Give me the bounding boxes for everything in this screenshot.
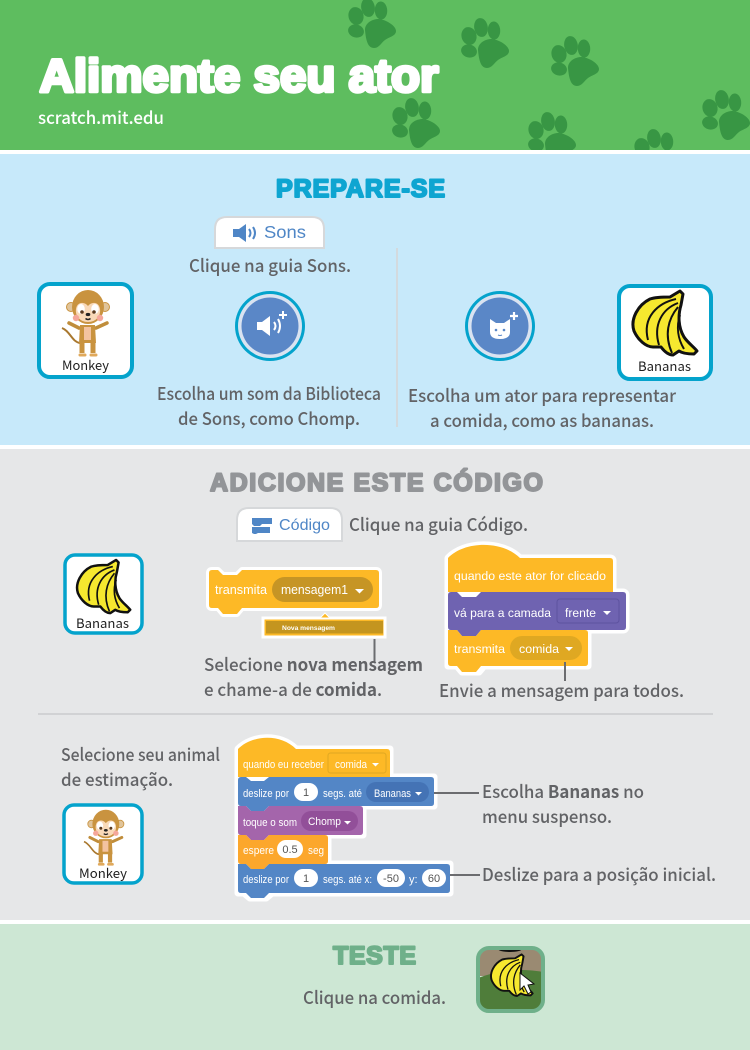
code stack: when sprite clicked: comida (519, 642, 559, 656)
code stack: when I receive (238, 738, 450, 898)
connector to bananas note (434, 792, 479, 794)
text: broadcast: Envie a mensagem para todos. (439, 678, 684, 703)
icon: bananas on stage with cursor (478, 946, 543, 1012)
code stack: when I receive: segs. até x: (323, 874, 372, 886)
code stack: when I receive: seg (308, 845, 324, 857)
code stack: when I receive: comida (335, 759, 368, 771)
code stack: when I receive: 1 (303, 787, 309, 799)
connector to position note (450, 874, 480, 876)
block: transmita with menu: mensagem1 (281, 582, 348, 597)
sprite card: monkey (39, 284, 132, 377)
code stack: when I receive: toque o som (243, 817, 297, 829)
block: transmita with menu (209, 570, 385, 637)
heading: adicione este codigo: ADICIONE ESTE CÓDIGO (210, 467, 543, 497)
panel: adicione este codigo (0, 449, 750, 920)
code stack: when I receive: Chomp (308, 816, 341, 828)
text: select pet: Selecione seu animal (61, 742, 220, 767)
code stack: when I receive: 0.5 (282, 844, 298, 856)
text: select new message: e chame-a de comida. (204, 677, 382, 702)
code stack: when sprite clicked: vá para a camada (454, 606, 551, 620)
panel: prepare-se (0, 154, 750, 445)
code stack: when I receive: quando eu receber (243, 759, 324, 771)
code stack: when I receive: y: (409, 874, 418, 886)
text: choose a sound (157, 381, 381, 431)
code stack: when I receive: -50 (383, 873, 399, 885)
text: clique na guia sons: Clique na guia Sons. (189, 253, 351, 278)
code stack: when I receive: deslize por (243, 874, 289, 886)
text: choose bananas (482, 779, 644, 829)
code stack: when I receive: 60 (428, 873, 440, 885)
text: glide to start: Deslize para a posição inicial. (482, 862, 716, 887)
code stack: when I receive: 1 (303, 873, 309, 885)
code stack: when sprite clicked: quando este ator for clicado (454, 569, 606, 583)
sprite card: bananas small (65, 555, 142, 633)
code stack: when I receive: segs. até (323, 788, 362, 800)
text: select new message (204, 652, 423, 702)
menu: nova mensagem (263, 613, 385, 637)
menu: nova mensagem: Nova mensagem (282, 625, 335, 632)
sprite card: monkey small (64, 805, 142, 883)
sprite card: bananas: Bananas (638, 356, 691, 375)
heading: prepare-se: PREPARE-SE (276, 175, 445, 203)
text: select new message: Selecione nova mensagem (204, 652, 423, 677)
text: choose a sound: de Sons, como Chomp. (178, 406, 360, 431)
icon: add sprite button (465, 291, 535, 361)
icon: add sound button (235, 291, 305, 361)
text: select pet (61, 742, 220, 792)
text: choose a sprite (408, 383, 677, 433)
code stack: when I receive: deslize por (243, 788, 289, 800)
paw prints (348, 0, 750, 150)
text: choose bananas: Escolha Bananas no (482, 779, 644, 804)
code stack: when sprite clicked: transmita (454, 642, 505, 656)
text: choose a sprite: Escolha um ator para representar (408, 383, 677, 408)
text: choose a sound: Escolha um som da Biblioteca (157, 381, 381, 406)
code tab: Código (279, 517, 330, 534)
url: scratch.mit.edu (38, 105, 164, 130)
sprite card: monkey: Monkey (62, 355, 109, 374)
heading: teste: TESTE (333, 942, 416, 970)
code stack: when I receive: espere (243, 845, 274, 857)
text: click food: Clique na comida. (303, 985, 446, 1010)
title: Alimente seu ator (40, 50, 439, 102)
code stack: when sprite clicked: frente (565, 606, 596, 620)
text: choose a sprite: a comida, como as bananas. (430, 408, 654, 433)
sprite card: bananas small: Bananas (76, 613, 129, 632)
sons tab: Sons (264, 222, 306, 242)
code stack: when I receive: Bananas (374, 788, 411, 800)
panel: teste (0, 924, 750, 1050)
sons tab (215, 217, 324, 248)
sprite card: monkey small: Monkey (79, 863, 127, 882)
header panel (0, 0, 750, 150)
code tab (237, 508, 342, 541)
sprite card: bananas (619, 286, 711, 379)
text: click code tab: Clique na guia Código. (349, 512, 528, 537)
block: transmita with menu: transmita (215, 582, 268, 597)
text: select pet: de estimação. (61, 767, 173, 792)
text: choose bananas: menu suspenso. (482, 804, 612, 829)
code stack: when sprite clicked (448, 545, 626, 672)
